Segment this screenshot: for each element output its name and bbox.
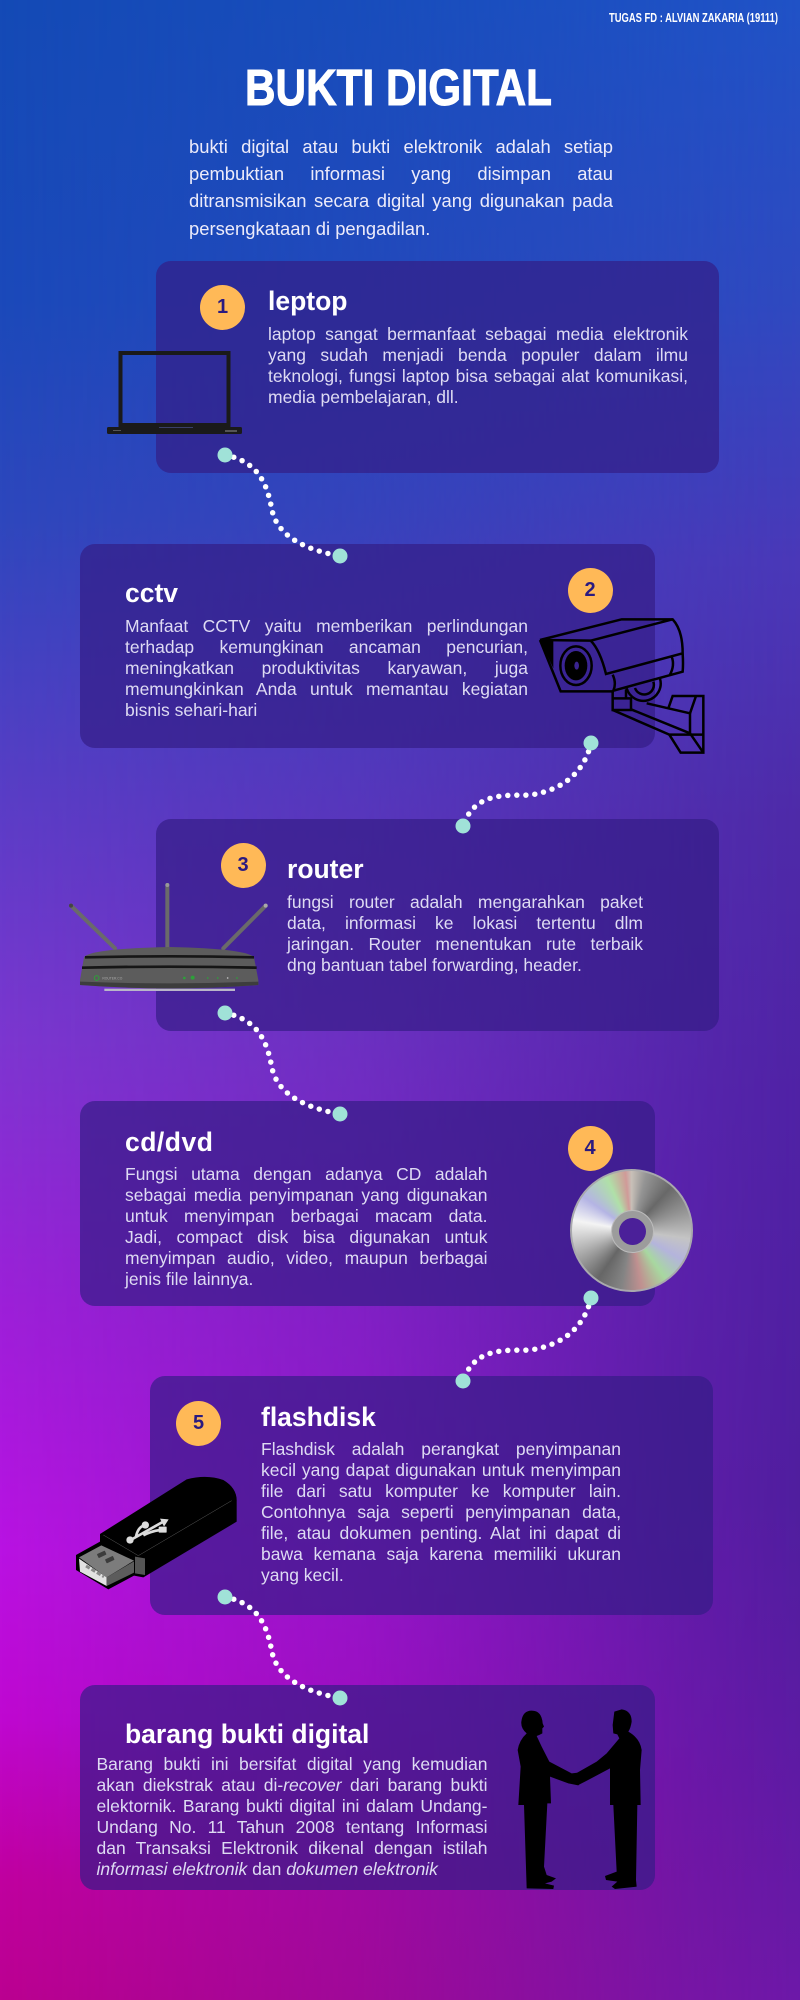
icon: router: ROUTER.CO <box>102 976 123 980</box>
heading: flashdisk: flashdisk <box>261 1402 376 1432</box>
dotted connector 3 <box>218 1006 348 1122</box>
body text: flashdisk: yang kecil. <box>261 1565 344 1585</box>
intro text: bukti digital atau bukti elektronik adalah setiap <box>189 136 613 157</box>
body text: barang bukti digital: Barang bukti ini bersifat digital yang kemudian <box>96 1754 488 1774</box>
dotted connector 2 <box>456 736 598 834</box>
body text: flashdisk <box>261 1439 621 1585</box>
body text: barang bukti digital: Undang No. 11 Tahun 2008 tentang Informasi <box>96 1817 488 1837</box>
intro text: persengkataan di pengadilan. <box>189 218 430 239</box>
number badge 4 <box>568 1126 612 1170</box>
body text: cctv: Manfaat CCTV yaitu memberikan perlindungan <box>125 616 528 636</box>
icon: cctv camera <box>538 618 705 754</box>
body text: barang bukti digital: akan diekstrak atau di-recover dari barang bukti <box>96 1775 487 1795</box>
number badge 2 <box>568 568 612 613</box>
body text: leptop: media pembelajaran, dll. <box>268 386 459 406</box>
panel: leptop <box>156 261 719 473</box>
title: BUKTI DIGITAL <box>245 59 552 116</box>
dotted connector 5 <box>218 1590 348 1706</box>
number badge 2: 2 <box>584 579 596 601</box>
intro text <box>189 136 613 239</box>
body text: cd/dvd: jenis file lainnya. <box>125 1269 253 1289</box>
body text: flashdisk: Flashdisk adalah perangkat penyimpanan <box>261 1439 621 1459</box>
intro text: pembuktian informasi yang disimpan atau <box>189 163 613 184</box>
dotted connector 1 <box>218 448 348 564</box>
body text: cctv: meningkatkan produktivitas karyawan, juga <box>125 658 528 678</box>
heading: cd/dvd: cd/dvd <box>125 1127 213 1157</box>
body text: router: fungsi router adalah mengarahkan paket <box>287 892 643 912</box>
body text: cd/dvd: Fungsi utama dengan adanya CD adalah <box>125 1164 488 1184</box>
body text: flashdisk: Contohnya saja seperti penyimpanan data, <box>261 1502 621 1522</box>
icon: compact disc <box>570 1168 693 1292</box>
body text: barang bukti digital: informasi elektronik dan dokumen elektronik <box>96 1859 438 1879</box>
body text: leptop: yang sudah menjadi benda populer dalam ilmu <box>268 344 688 364</box>
body text: leptop: teknologi, fungsi laptop bisa sebagai alat komunikasi, <box>268 366 688 386</box>
body text: flashdisk: file, atau dokumen penting. Alat ini dapat di <box>261 1523 621 1543</box>
panel: barang bukti digital <box>80 1685 655 1890</box>
body text: router: data, informasi ke lokasi tertentu dlm <box>287 913 643 933</box>
number badge 3 <box>220 843 266 888</box>
intro text: ditransmisikan secara digital yang digunakan pada <box>189 190 613 211</box>
body text: cctv <box>125 616 528 720</box>
body text: cd/dvd: sebagai media penyimpanan yang digunakan <box>125 1185 488 1205</box>
icon: laptop <box>107 351 242 434</box>
heading: leptop: leptop <box>268 286 348 316</box>
body text: router: jaringan. Router menentukan rute terbaik <box>287 934 643 954</box>
body text: cctv: terhadap kemungkinan ancaman pencurian, <box>125 636 528 656</box>
number badge 3: 3 <box>237 854 249 876</box>
body text: flashdisk: kecil yang dapat digunakan untuk menyimpan <box>261 1460 621 1480</box>
icon: usb flash drive <box>76 1476 237 1590</box>
body text: cctv: memungkinkan Anda untuk memantau kegiatan <box>125 678 528 698</box>
panel: cctv <box>80 544 655 748</box>
number badge 1 <box>200 284 245 330</box>
body text: barang bukti digital: dan Transaksi Elektronik dikenal dengan istilah <box>96 1838 488 1858</box>
body text: leptop <box>268 324 688 406</box>
heading: barang bukti digital: barang bukti digital <box>125 1719 369 1749</box>
body text: cd/dvd: menyimpan audio, video, maupun berbagai <box>125 1248 488 1268</box>
panel: flashdisk <box>150 1376 712 1615</box>
icon: handshake silhouettes <box>518 1709 642 1889</box>
number badge 5: 5 <box>193 1412 204 1434</box>
icon: router <box>68 883 268 991</box>
body text: router <box>286 892 643 975</box>
number badge 4: 4 <box>584 1136 596 1158</box>
body text: cd/dvd: untuk menyimpan berbagai macam data. <box>125 1206 488 1226</box>
body text: barang bukti digital <box>96 1754 488 1879</box>
number badge 5 <box>176 1400 221 1446</box>
panel: cd/dvd <box>80 1101 655 1306</box>
number badge 1: 1 <box>217 296 228 318</box>
body text: cd/dvd <box>124 1164 488 1289</box>
body text: flashdisk: file dari satu komputer ke komputer lain. <box>261 1481 621 1501</box>
body text: cctv: bisnis sehari-hari <box>125 700 257 720</box>
heading: router: router <box>287 854 364 884</box>
body text: router: dng bantuan tabel forwarding, header. <box>287 955 582 975</box>
heading: cctv: cctv <box>125 578 178 608</box>
disc hub <box>611 1210 654 1252</box>
body text: cd/dvd: Jadi, compact disk bisa digunakan untuk <box>125 1227 488 1247</box>
dotted connector 4 <box>456 1290 598 1388</box>
body text: barang bukti digital: elektornik. Barang bukti digital ini dalam Undang- <box>96 1796 488 1816</box>
body text: leptop: laptop sangat bermanfaat sebagai media elektronik <box>268 324 688 344</box>
panel: router <box>156 819 719 1031</box>
body text: flashdisk: bawa kemana saja karena memiliki ukuran <box>261 1544 621 1564</box>
